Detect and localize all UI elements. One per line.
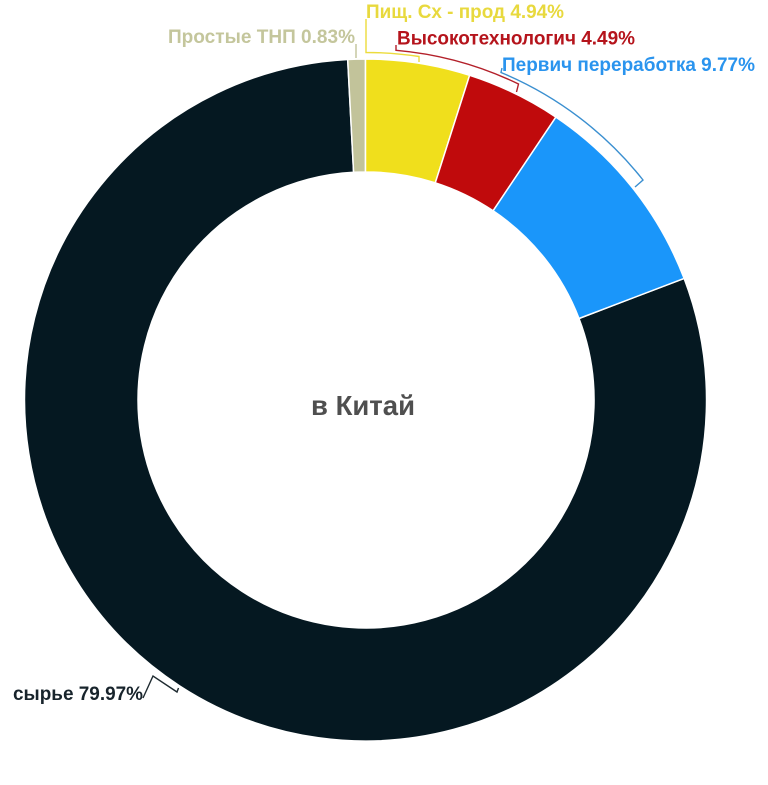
label: сырье: сырье 79.97% <box>13 683 143 705</box>
segment: Пищ. Сх - прод 4.94% <box>366 59 470 183</box>
label: Простые ТНП: Простые ТНП 0.83% <box>168 26 355 48</box>
donut chart <box>25 59 707 741</box>
label: Первич переработка: Первич переработка 9.77% <box>502 54 755 76</box>
leader: Пищ. Сх - прод <box>366 19 419 62</box>
label: Высокотехнологич: Высокотехнологич 4.49% <box>397 28 635 50</box>
leader: сырье <box>143 676 178 698</box>
segment: Простые ТНП 0.83% <box>348 59 366 172</box>
leader: Высокотехнологич <box>396 45 518 92</box>
segment: сырье 79.97% <box>25 60 707 741</box>
leader: Простые ТНП <box>355 44 357 58</box>
segment: Первич переработка 9.77% <box>493 117 684 318</box>
segment: Высокотехнологич 4.49% <box>435 75 556 211</box>
label: Пищ. Сх - прод: Пищ. Сх - прод 4.94% <box>366 1 564 23</box>
leader: Первич переработка <box>501 68 643 187</box>
center label: в Китай <box>311 390 415 421</box>
